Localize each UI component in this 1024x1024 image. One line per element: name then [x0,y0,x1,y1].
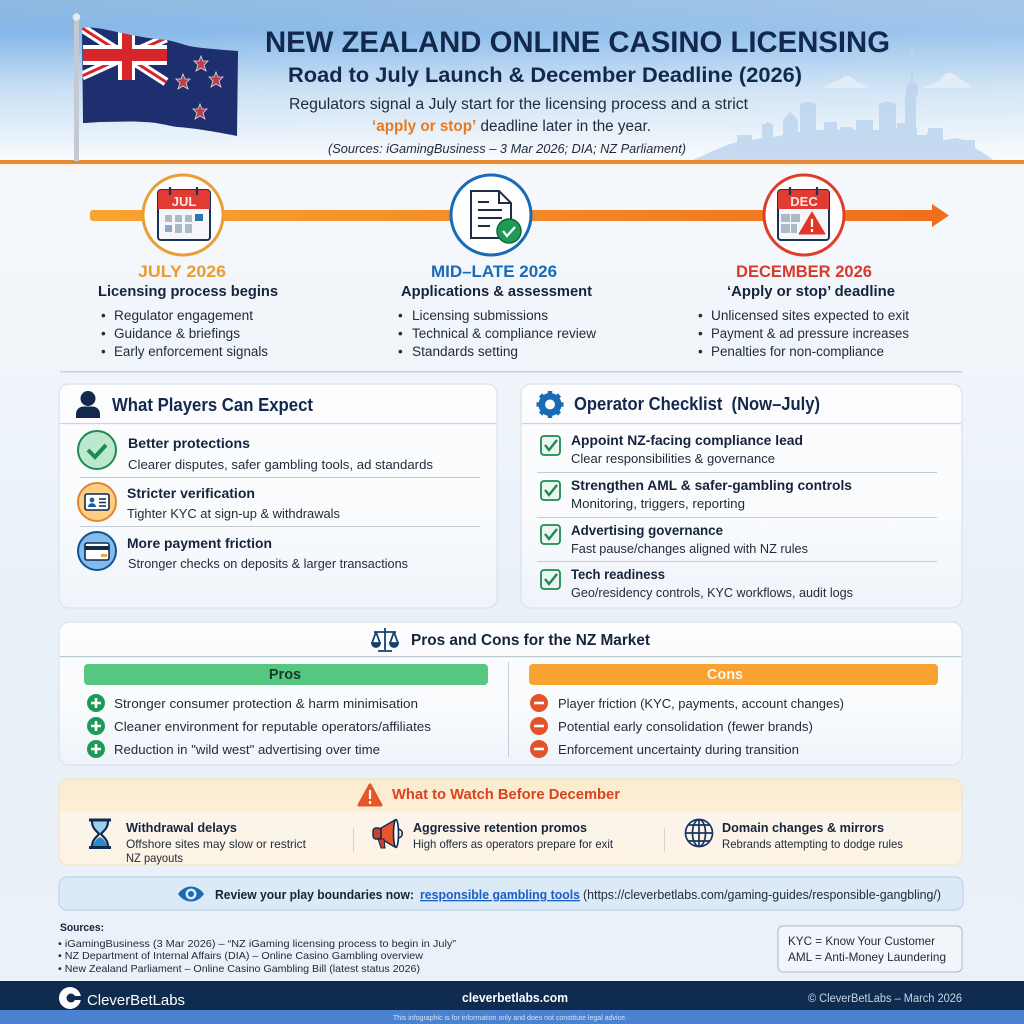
cons list: Enforcement uncertainty during transition [558,742,799,757]
icon: July calendar [143,175,223,255]
item: compliance lead [541,432,803,466]
item: compliance lead: Clear responsibilities & governance [571,452,775,466]
timeline column: July: • [101,308,106,323]
item: withdrawal delays: NZ payouts [126,851,183,865]
item: tech readiness: Geo/residency controls, KYC workflows, audit logs [571,586,853,600]
header banner [0,0,1024,167]
sources: Sources: [60,922,104,934]
timeline column: mid-late: Standards setting [412,344,518,359]
cons list: Potential early consolidation (fewer brands) [558,719,813,734]
orange rule [0,160,1024,164]
timeline column: July: Regulator engagement [114,308,253,323]
timeline column: mid-late: Licensing submissions [412,308,548,323]
item: stricter verification: Tighter KYC at sign-up & withdrawals [127,506,340,521]
heading: Pros and Cons for the NZ Market [411,632,651,649]
timeline column: July: Early enforcement signals [114,344,268,359]
sources: • NZ Department of Internal Affairs (DIA) – Online Casino Gambling overview [58,950,423,962]
pros header: Pros [269,667,301,683]
item: domain changes: Domain changes & mirrors [722,820,884,835]
item: tech readiness: Tech readiness [571,566,665,582]
timeline column: December: Unlicensed sites expected to exit [711,308,909,323]
title: NEW ZEALAND ONLINE CASINO LICENSING [265,26,890,59]
icon: eye [178,886,204,902]
item: stricter verification [78,483,340,521]
timeline column: mid-late [398,262,596,359]
pros list [87,694,432,758]
item: better protections: Clearer disputes, safer gambling tools, ad standards [128,457,434,472]
icon: document with check [451,175,531,255]
footer: cleverbetlabs.com [462,990,568,1005]
item: better protections: Better protections [128,435,250,451]
intro text: ‘apply or stop’ deadline later in the year. [372,118,651,135]
header sources: (Sources: iGamingBusiness – 3 Mar 2026; DIA; NZ Parliament) [328,141,686,156]
item: withdrawal delays: Offshore sites may slow or restrict [126,837,307,851]
timeline column: December [698,262,909,359]
panel: what players can expect [59,384,497,608]
item: stricter verification: Stricter verification [127,485,255,501]
footer: © CleverBetLabs – March 2026 [808,993,962,1005]
item: AML controls: Strengthen AML & safer-gambling controls [571,477,852,493]
item: aggressive retention promos: High offers as operators prepare for exit [413,837,614,851]
panel: pros and cons [59,622,962,765]
timeline column: December: • [698,308,703,323]
glossary box [778,926,962,972]
cons header: Cons [707,667,743,683]
callout: responsible gambling: responsible gambling tools [420,887,580,902]
intro text: Regulators signal a July start for the licensing process and a strict [289,96,749,113]
sources [58,922,457,975]
item: compliance lead: Appoint NZ-facing compliance lead [571,432,803,448]
item: aggressive retention promos [373,820,614,851]
timeline column: December: Payment & ad pressure increases [711,326,909,341]
icon: scales [372,628,398,651]
item: advertising governance [541,522,808,556]
callout: responsible gambling: (https://cleverbetlabs.com/gaming-guides/responsible-gangbling/) [583,888,941,902]
intro text [289,96,749,135]
item: tech readiness [541,566,853,600]
glossary box: AML = Anti-Money Laundering [788,950,946,964]
footer: This infographic is for information only and does not constitute legal advice. [393,1015,627,1022]
timeline column: December: • [698,344,703,359]
arrow: timeline [90,204,949,227]
footer: CleverBetLabs [87,992,185,1009]
item: AML controls [541,477,852,511]
timeline column: July: Guidance & briefings [114,326,240,341]
pros list: Reduction in "wild west" advertising over time [114,742,380,757]
timeline column: mid-late: • [398,326,403,341]
timeline column: December: ‘Apply or stop’ deadline [727,283,895,300]
item: AML controls: Monitoring, triggers, reporting [571,497,745,511]
icon: July calendar: JUL [172,194,196,209]
icon: warning triangle [359,785,381,805]
cons header [529,664,938,685]
timeline column: December: DECEMBER 2026 [736,262,872,281]
timeline column: mid-late: Applications & assessment [401,283,592,300]
glossary box: KYC = Know Your Customer [788,934,935,948]
timeline column: July: • [101,344,106,359]
heading: What to Watch Before December [392,786,620,803]
sources: • iGamingBusiness (3 Mar 2026) – “NZ iGaming licensing process to begin in July” [58,938,457,950]
footer [0,981,1024,1024]
item: more payment friction: Stronger checks on deposits & larger transactions [128,556,408,571]
icon: New Zealand flag [73,13,242,161]
item: advertising governance: Advertising governance [571,522,723,538]
pros list: Stronger consumer protection & harm minimisation [114,696,418,711]
callout: responsible gambling: Review your play boundaries now: [215,887,414,902]
item: withdrawal delays: Withdrawal delays [126,820,237,835]
panel: operator checklist [521,384,962,608]
cons list [530,694,844,758]
panel: what to watch [59,779,962,865]
icon: logo [59,987,82,1009]
callout: responsible gambling [59,877,963,910]
timeline column: July: • [101,326,106,341]
item: aggressive retention promos: Aggressive retention promos [413,820,587,835]
timeline column: mid-late: • [398,344,403,359]
timeline column: mid-late: • [398,308,403,323]
pros list: Cleaner environment for reputable operators/affiliates [114,719,432,734]
pros header [84,664,488,685]
timeline column: December: Penalties for non-compliance [711,344,884,359]
timeline column: July [98,262,278,359]
skyline [693,42,993,160]
icon: December calendar with warning: DEC [790,194,818,209]
item: more payment friction [78,532,408,571]
item: better protections [78,431,434,472]
item: withdrawal delays [89,820,307,865]
heading: Operator Checklist (Now–July) [574,394,820,414]
timeline column: July: Licensing process begins [98,283,278,300]
item: domain changes: Rebrands attempting to dodge rules [722,837,903,851]
subtitle: Road to July Launch & December Deadline (2026) [288,64,802,87]
timeline column: mid-late: Technical & compliance review [412,326,596,341]
timeline column: mid-late: MID–LATE 2026 [431,262,557,281]
timeline column: December: • [698,326,703,341]
heading: What Players Can Expect [112,395,313,415]
icon: person [76,391,100,418]
icon: December calendar with warning [764,175,844,255]
icon: gear [536,391,564,418]
item: advertising governance: Fast pause/changes aligned with NZ rules [571,542,808,556]
item: more payment friction: More payment friction [127,535,272,551]
timeline column: July: JULY 2026 [138,262,226,281]
cons list: Player friction (KYC, payments, account changes) [558,696,844,711]
item: domain changes [686,820,903,851]
sources: • New Zealand Parliament – Online Casino Gambling Bill (latest status 2026) [58,963,420,975]
clouds [823,73,972,88]
